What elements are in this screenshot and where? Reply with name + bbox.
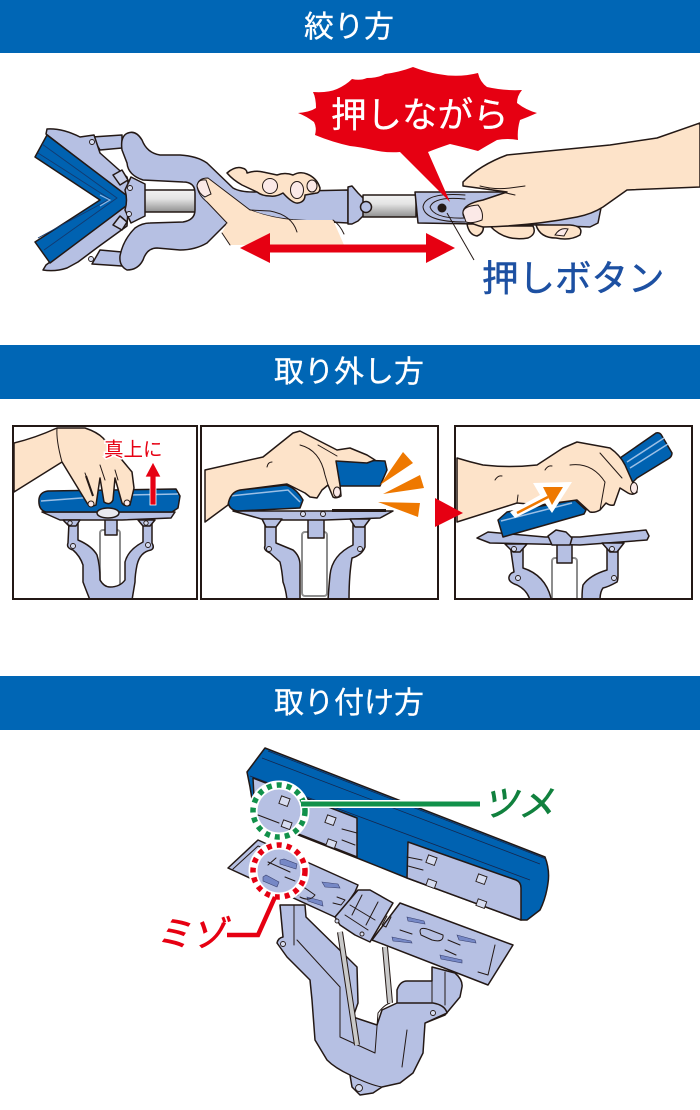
green leader	[301, 800, 480, 808]
rods	[340, 932, 390, 1045]
blue pad left	[228, 485, 303, 511]
blue pad right	[330, 459, 387, 486]
label: push button: 押しボタン	[482, 258, 664, 299]
right hand lower fingers	[467, 224, 581, 239]
pad hooks	[325, 815, 487, 908]
plate	[42, 512, 175, 520]
hand	[205, 431, 375, 522]
illustration: attaching the pad	[156, 748, 554, 1095]
fingernail	[630, 482, 638, 494]
callout text: 押しながら	[331, 95, 509, 135]
white-and-orange arrow	[510, 482, 572, 518]
leader line	[447, 213, 474, 260]
mop plates	[43, 129, 130, 271]
handle body	[120, 132, 348, 270]
heading: 取り外し方	[0, 345, 700, 399]
frame rod	[302, 532, 327, 596]
label: ミゾ: ミゾ	[156, 915, 231, 954]
center stem	[308, 518, 324, 538]
left hand thumb and palm	[197, 178, 344, 245]
blue pad lower	[498, 500, 586, 537]
hand	[14, 428, 134, 506]
mop links	[92, 135, 122, 266]
red double arrow	[240, 233, 455, 263]
plate right	[372, 903, 513, 985]
arrow: next step triangle	[435, 498, 463, 527]
blue pad	[39, 489, 180, 512]
center joint	[125, 177, 145, 223]
heading: 取り外し方: 取り外し方	[274, 356, 424, 389]
panel: lift straight up	[13, 426, 197, 600]
hinge	[97, 508, 119, 518]
push button dot	[438, 204, 446, 212]
mop frame back arm	[397, 967, 462, 1023]
plate	[477, 530, 649, 545]
hand	[457, 442, 637, 522]
collar	[348, 186, 373, 224]
orange rays	[378, 452, 424, 517]
mop frame body	[277, 905, 447, 1095]
blue pad	[247, 748, 549, 920]
heading: 取り付け方: 取り付け方	[274, 687, 424, 720]
U-shaped frame	[68, 522, 153, 600]
red arrow up	[145, 462, 161, 505]
label: straight up: 真上に	[104, 439, 163, 461]
grey rod right	[363, 195, 416, 217]
grey rod left	[143, 190, 196, 212]
U-shaped frame	[509, 544, 551, 600]
mop joints	[113, 170, 128, 230]
center stem	[557, 543, 572, 563]
grip	[415, 192, 601, 227]
heading: 取り付け方	[0, 676, 700, 730]
plate slots	[307, 882, 476, 963]
plate	[233, 511, 393, 520]
U-shaped frame	[265, 522, 300, 600]
fingernail	[334, 487, 340, 497]
pad left panel	[253, 778, 357, 857]
panel: press the pad edge	[201, 426, 438, 600]
left hand fingers	[227, 168, 320, 203]
red dotted circle: groove	[253, 845, 305, 897]
frame rod	[100, 530, 120, 588]
red leader	[227, 897, 275, 935]
hinge	[335, 890, 393, 942]
heading: 絞り方: 絞り方	[304, 11, 394, 44]
callout burst	[298, 67, 537, 202]
blue pad upper	[620, 432, 673, 482]
label: ツメ: ツメ	[482, 783, 554, 824]
plate left	[228, 840, 358, 918]
green dotted circle: hook	[253, 785, 305, 837]
heading: 絞り方	[0, 0, 700, 53]
mop head blue V	[35, 135, 128, 263]
illustration: squeezing the mop handle	[35, 67, 700, 299]
pad right panel	[407, 842, 521, 920]
frame rod	[552, 558, 577, 602]
center stem	[105, 518, 117, 535]
right hand	[463, 123, 700, 227]
panel: remove the pad	[455, 426, 692, 602]
